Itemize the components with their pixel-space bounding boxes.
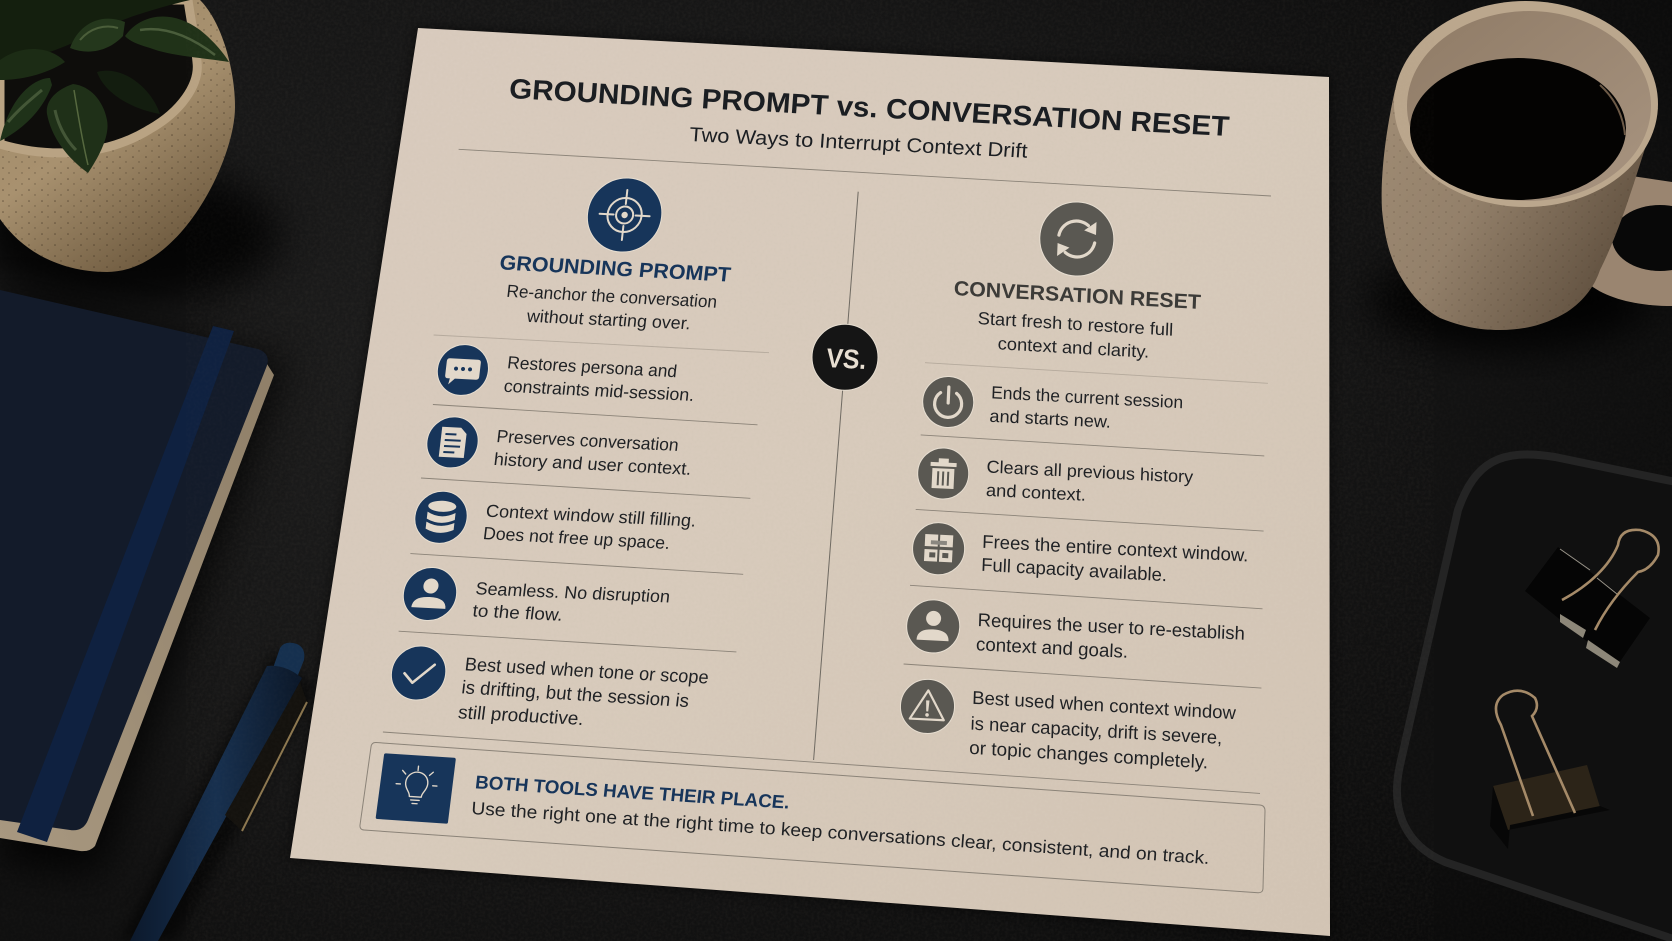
icon: document: [424, 416, 481, 469]
panel: grounding prompt: [388, 176, 769, 729]
description: without starting over.: [525, 306, 692, 333]
tray with binder clips: [1397, 454, 1672, 941]
item: best used near capacity: [899, 678, 1237, 773]
item: best used near capacity: Best used when context window: [972, 687, 1237, 723]
item: restores persona: Restores persona and: [506, 352, 678, 381]
icon: person: [905, 599, 961, 654]
coffee mug: [1370, 1, 1672, 350]
item: seamless: [400, 566, 671, 625]
heading: grounding prompt: GROUNDING PROMPT: [498, 251, 732, 287]
panel: conversation reset: [899, 200, 1268, 773]
icon: check: [388, 645, 449, 701]
callout text: Use the right one at the right time to keep conversations clear, consistent, and on track.: [471, 798, 1210, 868]
icon: database: [412, 490, 470, 545]
item: context window filling: [412, 490, 697, 553]
center divider with VS badge: [812, 192, 878, 760]
item: restores persona: [435, 343, 695, 405]
item: frees context window: Full capacity available.: [981, 554, 1167, 585]
item: best used when drifting: Best used when tone or scope: [464, 653, 710, 688]
item: seamless: to the flow.: [471, 600, 564, 625]
item: preserves conversation: history and user context.: [493, 449, 693, 479]
item: clears history: and context.: [986, 480, 1086, 505]
description: [977, 308, 1174, 362]
description: [506, 281, 718, 333]
item: context window filling: Context window still filling.: [485, 501, 697, 531]
icon: power: [922, 375, 975, 429]
item: seamless: Seamless. No disruption: [475, 578, 671, 607]
item: preserves conversation: Preserves conversation: [496, 426, 680, 455]
plant pot with leaves: [0, 0, 280, 305]
heading: conversation reset: CONVERSATION RESET: [953, 277, 1202, 314]
item: restores persona: constraints mid-session.: [503, 376, 695, 405]
pen: [120, 643, 315, 941]
binder clip 2: [1490, 691, 1610, 849]
item: preserves conversation: [424, 416, 693, 479]
item: clears history: Clears all previous history: [986, 457, 1194, 487]
description: context and clarity.: [997, 333, 1150, 362]
item: best used near capacity: is near capacity, drift is severe,: [970, 713, 1223, 748]
title: GROUNDING PROMPT vs. CONVERSATION RESET: [508, 73, 1230, 142]
item: frees context window: [911, 521, 1249, 585]
icon: chat bubble: [435, 343, 491, 397]
icon: target: [584, 176, 666, 254]
item: context window filling: Does not free up space.: [482, 523, 671, 553]
item: ends session: Ends the current session: [991, 382, 1184, 412]
item: best used when drifting: still productive.: [457, 701, 585, 729]
binder clip 1: [1525, 530, 1659, 668]
center divider with VS badge: VS.: [825, 343, 868, 375]
icon: refresh: [1038, 200, 1115, 278]
description: Start fresh to restore full: [977, 308, 1174, 340]
item: requires user: [905, 599, 1245, 662]
item: ends session: [922, 375, 1184, 432]
callout: both tools: [360, 742, 1265, 893]
item: frees context window: Frees the entire context window.: [982, 531, 1249, 565]
item: ends session: and starts new.: [989, 406, 1111, 432]
item: requires user: Requires the user to re-establish: [977, 609, 1245, 644]
icon: lightbulb: [376, 753, 456, 824]
notebook with elastic band: [0, 290, 285, 875]
icon: warning: [899, 678, 956, 735]
icon: grid: [911, 521, 966, 576]
item: best used when drifting: is drifting, but the session is: [461, 676, 690, 711]
item: best used near capacity: or topic changes completely.: [969, 737, 1209, 773]
description: Re-anchor the conversation: [506, 281, 718, 312]
subtitle: Two Ways to Interrupt Context Drift: [689, 124, 1029, 163]
icon: trash: [917, 447, 970, 500]
item: requires user: context and goals.: [976, 633, 1129, 662]
item: best used when drifting: [388, 645, 710, 729]
paper sheet: [290, 28, 1330, 936]
icon: person: [400, 566, 460, 622]
item: clears history: [917, 447, 1194, 505]
callout heading: BOTH TOOLS HAVE THEIR PLACE.: [474, 771, 791, 813]
